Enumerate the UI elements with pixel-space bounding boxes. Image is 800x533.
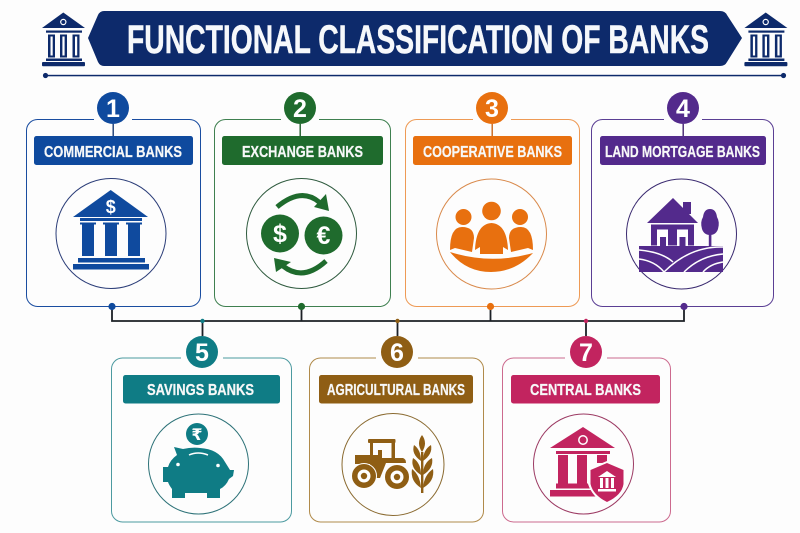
number badge (667, 92, 699, 124)
number badge: 1 (106, 95, 120, 123)
icon: group of people (436, 179, 546, 289)
label (600, 136, 766, 165)
panel: agricultural banks (310, 336, 484, 522)
number badge: 3 (485, 95, 499, 123)
header rule (43, 73, 786, 78)
number badge: 4 (676, 95, 690, 123)
header (42, 11, 787, 78)
number badge (570, 336, 602, 368)
number badge: 7 (579, 339, 593, 367)
connector lines (112, 306, 684, 336)
connector dot (487, 303, 494, 310)
label: CENTRAL BANKS (530, 382, 641, 399)
label: COOPERATIVE BANKS (423, 144, 562, 161)
connector dot (298, 303, 305, 310)
icon: house on fields (626, 179, 736, 289)
icon: currency exchange: € (317, 222, 331, 250)
icon: tractor and wheat (342, 414, 444, 516)
label: AGRICULTURAL BANKS (327, 382, 465, 399)
label: EXCHANGE BANKS (242, 144, 363, 161)
label (123, 375, 280, 404)
icon: right bank (744, 12, 787, 66)
label: COMMERCIAL BANKS (44, 144, 182, 161)
title banner (88, 11, 742, 66)
panel: land mortgage banks (592, 92, 774, 310)
number badge (284, 92, 316, 124)
icon: bank with dollar: $ (106, 197, 116, 217)
panel: cooperative banks (406, 92, 580, 310)
label (34, 136, 193, 165)
number badge (381, 336, 413, 368)
icon: bank with dollar (56, 178, 166, 288)
icon: piggy bank with rupee: ₹ (191, 425, 203, 444)
number badge (97, 92, 129, 124)
number badge: 2 (293, 95, 307, 123)
number badge (476, 92, 508, 124)
number badge: 5 (195, 339, 209, 367)
connector dot (680, 303, 688, 310)
icon: currency exchange (246, 178, 356, 288)
panel: commercial banks (26, 92, 200, 310)
label (511, 375, 660, 404)
number badge (186, 336, 218, 368)
icon: currency exchange: $ (273, 220, 287, 248)
label (413, 136, 572, 165)
panel: central banks (502, 336, 670, 522)
icon: bank with shield (534, 414, 634, 514)
icon: left bank (42, 12, 85, 66)
number badge: 6 (390, 339, 404, 367)
panel: exchange banks (214, 92, 390, 310)
panel: savings banks (112, 336, 292, 522)
label (319, 375, 473, 404)
connector dot (108, 303, 116, 310)
label (222, 136, 383, 165)
label: SAVINGS BANKS (147, 382, 254, 399)
icon: piggy bank with rupee (148, 414, 248, 514)
